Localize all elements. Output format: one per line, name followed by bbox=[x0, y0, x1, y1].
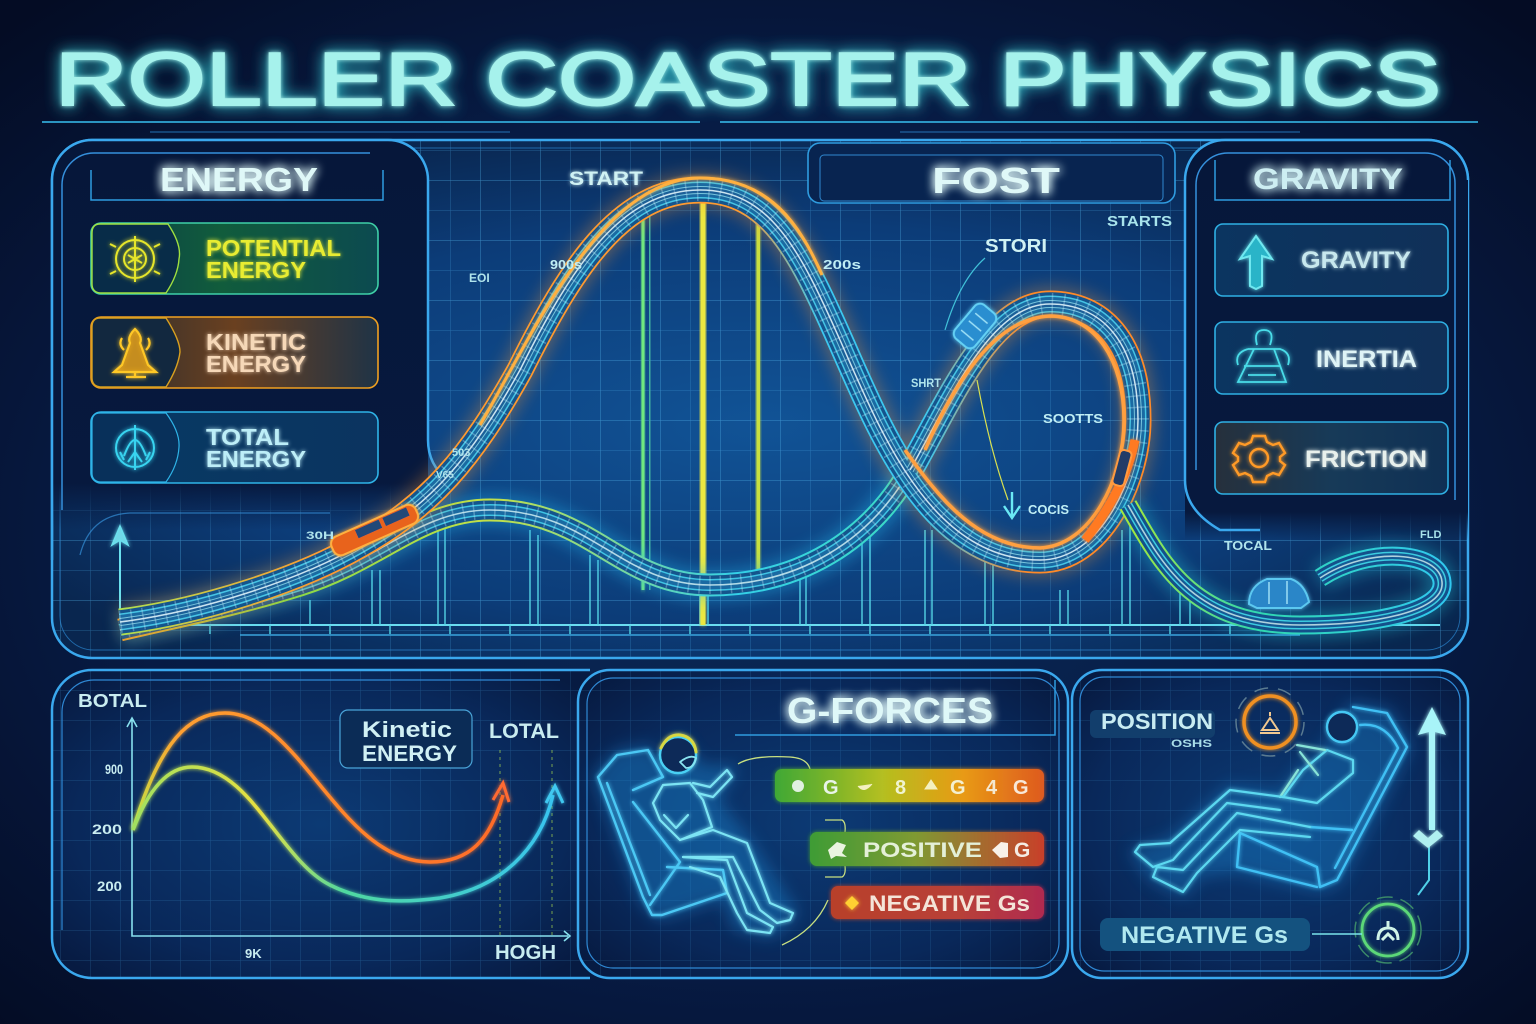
small down arrow and leader bbox=[945, 258, 1020, 518]
orange track glow near loop exit bbox=[1085, 440, 1135, 540]
label: negative gs: NEGATIVE Gs bbox=[1121, 922, 1288, 949]
track labels: FLD bbox=[1420, 529, 1441, 541]
orange highlight on the hill bbox=[480, 178, 822, 425]
label: position bbox=[1090, 709, 1215, 750]
connector lines bbox=[738, 757, 845, 945]
bar: positive g: POSITIVE bbox=[863, 839, 982, 862]
bar: g scale: 8 bbox=[895, 777, 906, 799]
chart labels: 200 bbox=[92, 821, 122, 837]
heading: g-forces: G-FORCES bbox=[787, 690, 993, 731]
label: position: POSITION bbox=[1101, 709, 1213, 734]
curve: total bbox=[133, 767, 553, 901]
low track section bbox=[120, 470, 910, 630]
axis: main chart bbox=[80, 513, 1440, 635]
chart labels: 9K bbox=[245, 946, 262, 961]
card: total energy: TOTAL bbox=[206, 424, 289, 450]
exit track section bbox=[1128, 505, 1442, 625]
track labels: EOI bbox=[469, 271, 490, 285]
icon: up arrow bbox=[1413, 707, 1446, 895]
main panel: track area bbox=[52, 140, 1468, 658]
card: kinetic energy: KINETIC bbox=[206, 329, 306, 355]
icon: green ring bbox=[1355, 897, 1421, 963]
card: friction bbox=[1215, 422, 1448, 494]
chart labels: HOGH bbox=[495, 942, 556, 964]
track labels: STORI bbox=[985, 236, 1047, 256]
panel: gravity bbox=[1185, 140, 1468, 540]
track labels: SHRT bbox=[911, 376, 942, 390]
card: total energy: ENERGY bbox=[206, 446, 306, 472]
panel: g-forces bbox=[578, 670, 1068, 978]
icon: seated rider bbox=[598, 735, 793, 933]
title: ROLLER COASTER PHYSICS bbox=[55, 37, 1441, 121]
hill and loop track section bbox=[120, 190, 1138, 622]
bar: g scale: G bbox=[950, 777, 966, 799]
dashed guide bbox=[500, 750, 552, 935]
chart labels: BOTAL bbox=[78, 691, 147, 711]
rider head bbox=[660, 735, 696, 773]
kinetic energy label box: ENERGY bbox=[362, 741, 457, 766]
rider head bbox=[1327, 712, 1357, 742]
chart labels: 900 bbox=[105, 761, 123, 777]
track labels: STARTS bbox=[1107, 213, 1172, 230]
heading: gravity: GRAVITY bbox=[1253, 163, 1403, 196]
bar: g scale bbox=[775, 769, 1044, 802]
seat bbox=[1237, 707, 1407, 887]
track labels: 900s bbox=[550, 257, 582, 272]
panel: energy chart bbox=[52, 670, 590, 978]
icon: potential energy bbox=[110, 236, 160, 282]
chart labels: LOTAL bbox=[489, 720, 559, 743]
track labels bbox=[306, 169, 1441, 553]
hill supports bbox=[642, 190, 760, 625]
coaster car: orange bbox=[329, 502, 421, 558]
rider glow bbox=[598, 740, 793, 933]
arrow: total bbox=[546, 786, 563, 803]
bar: negative gs bbox=[831, 886, 1044, 919]
panel: top center header bbox=[808, 143, 1175, 203]
card: potential energy: POTENTIAL bbox=[206, 235, 341, 261]
icon: total energy bbox=[116, 425, 154, 470]
curve: kinetic bbox=[133, 713, 503, 862]
kinetic energy label box: Kinetic bbox=[362, 717, 452, 742]
track labels: 30H bbox=[306, 530, 334, 542]
icon: up arrow bbox=[1240, 236, 1272, 289]
bar: g scale: G bbox=[823, 777, 839, 799]
bar: negative gs: NEGATIVE Gs bbox=[869, 891, 1030, 916]
track labels: TOCAL bbox=[1224, 538, 1272, 553]
coaster car: blue at exit bbox=[1249, 579, 1309, 608]
heading: energy: ENERGY bbox=[160, 161, 318, 198]
icon: kinetic energy bbox=[114, 329, 156, 378]
card: inertia: INERTIA bbox=[1316, 346, 1417, 373]
bar: g scale: G bbox=[1013, 777, 1029, 799]
track labels: COCIS bbox=[1028, 502, 1069, 517]
icon: reclined rider bbox=[1135, 707, 1407, 892]
coaster car: small on loop bbox=[1112, 449, 1132, 487]
axes bbox=[127, 718, 570, 941]
track labels: START bbox=[569, 169, 643, 190]
rider body bbox=[653, 770, 793, 933]
track labels: SOOTTS bbox=[1043, 411, 1103, 426]
panel: position bbox=[1072, 670, 1468, 978]
title: ROLLER COASTER PHYSICS bbox=[55, 37, 1441, 121]
panel: energy bbox=[52, 140, 448, 560]
card: friction: FRICTION bbox=[1305, 446, 1427, 473]
card: gravity bbox=[1215, 224, 1448, 296]
card: gravity: GRAVITY bbox=[1301, 247, 1411, 274]
icon: inertia rider bbox=[1237, 330, 1289, 382]
kinetic energy label box bbox=[340, 710, 472, 768]
chart labels bbox=[78, 691, 559, 964]
bar: positive g: G bbox=[1014, 839, 1030, 862]
chart labels: 200 bbox=[97, 878, 122, 894]
icon: orange ring bbox=[1236, 688, 1304, 756]
roller coaster track bbox=[120, 178, 1442, 630]
seat bbox=[598, 750, 727, 915]
label: negative gs bbox=[1100, 918, 1362, 951]
card: kinetic energy bbox=[91, 317, 378, 388]
track labels: 200s bbox=[823, 257, 861, 272]
card: inertia bbox=[1215, 322, 1448, 394]
bar: positive g bbox=[810, 832, 1044, 866]
rider body bbox=[1135, 745, 1353, 892]
panel: top center header: FOST bbox=[932, 160, 1060, 201]
card: kinetic energy: ENERGY bbox=[206, 351, 306, 377]
track supports bbox=[150, 520, 1290, 634]
inner orange highlight on the loop bbox=[905, 316, 1124, 548]
rider glow bbox=[1135, 707, 1407, 892]
coaster car: blue on loop bbox=[951, 301, 999, 351]
card: potential energy: ENERGY bbox=[206, 257, 306, 283]
track labels: 503 bbox=[452, 447, 470, 459]
icon: gear bbox=[1233, 436, 1285, 482]
track labels: V65 bbox=[436, 470, 454, 481]
arrow: kinetic bbox=[493, 783, 509, 802]
title bbox=[42, 37, 1478, 132]
bar: g scale: 4 bbox=[986, 777, 998, 799]
card: potential energy bbox=[91, 223, 378, 294]
label: position: OSHS bbox=[1171, 738, 1212, 750]
card: total energy bbox=[91, 412, 378, 483]
